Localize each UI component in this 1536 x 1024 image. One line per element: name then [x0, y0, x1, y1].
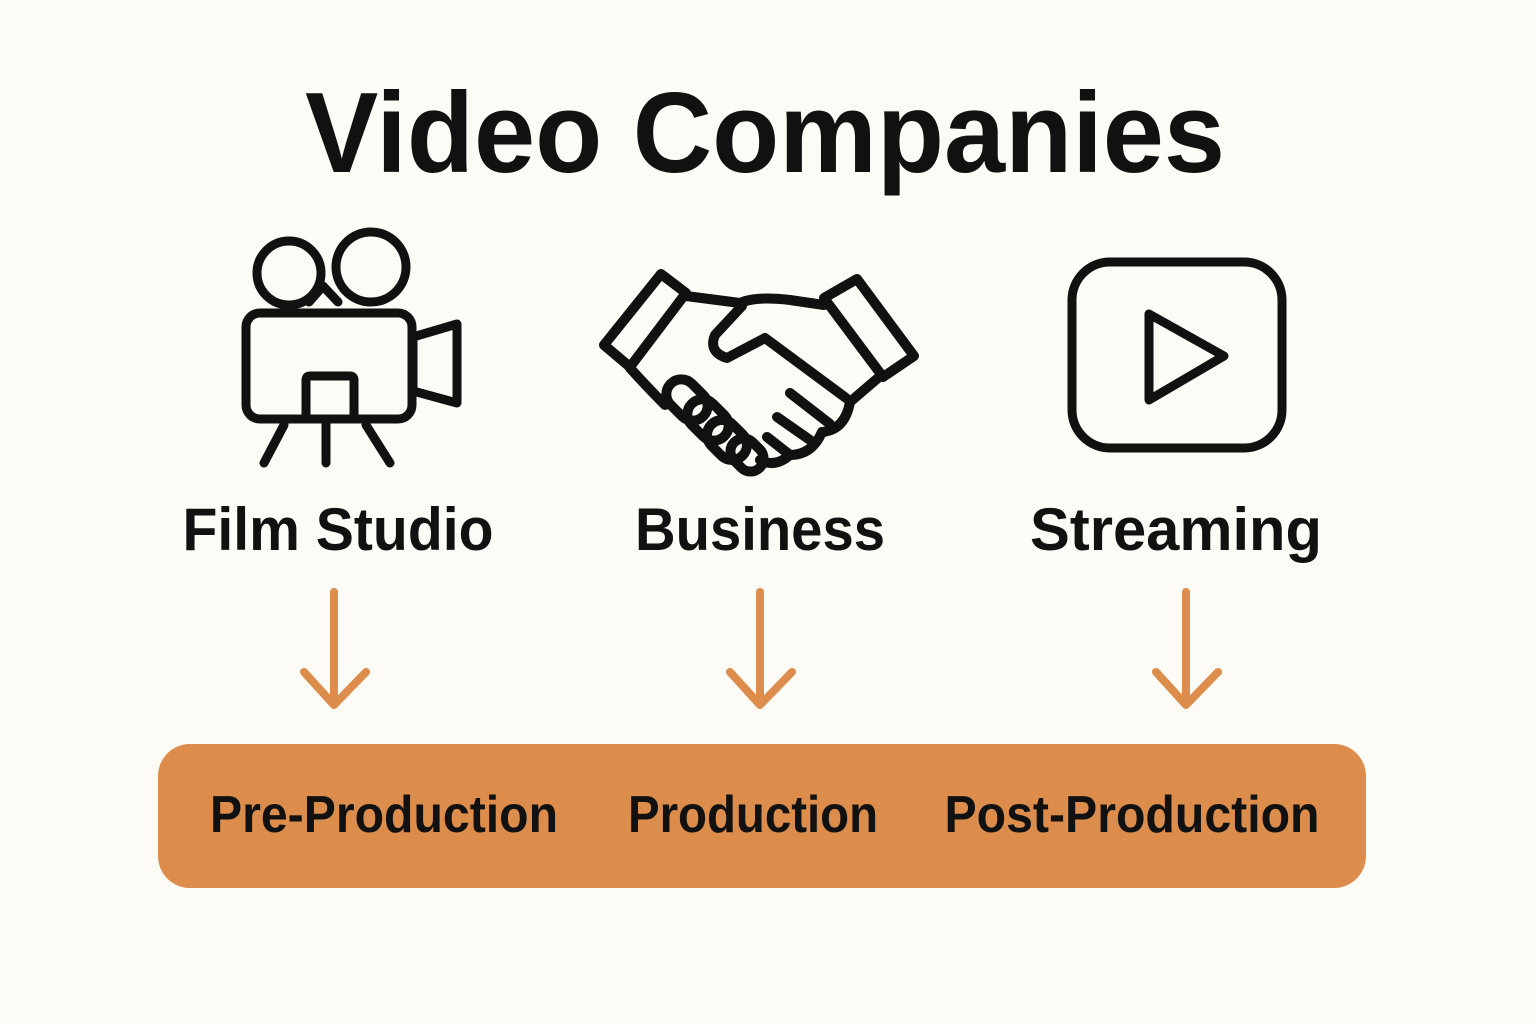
stage: Pre-Production: Pre-Production — [210, 786, 558, 844]
stage: Production: Production — [628, 786, 878, 844]
bar: production stages — [158, 744, 1366, 888]
icon: film camera — [246, 232, 457, 463]
label: Streaming: Streaming — [1030, 496, 1322, 563]
title: Video Companies — [305, 70, 1225, 197]
icon: handshake — [604, 274, 914, 477]
label: Film Studio: Film Studio — [182, 496, 494, 563]
stage: Post-Production: Post-Production — [944, 786, 1320, 844]
arrow 1 — [304, 592, 366, 705]
arrow 3 — [1156, 592, 1218, 705]
label: Business: Business — [635, 496, 885, 563]
icon: play button — [1072, 262, 1282, 448]
arrow 2 — [730, 592, 792, 705]
